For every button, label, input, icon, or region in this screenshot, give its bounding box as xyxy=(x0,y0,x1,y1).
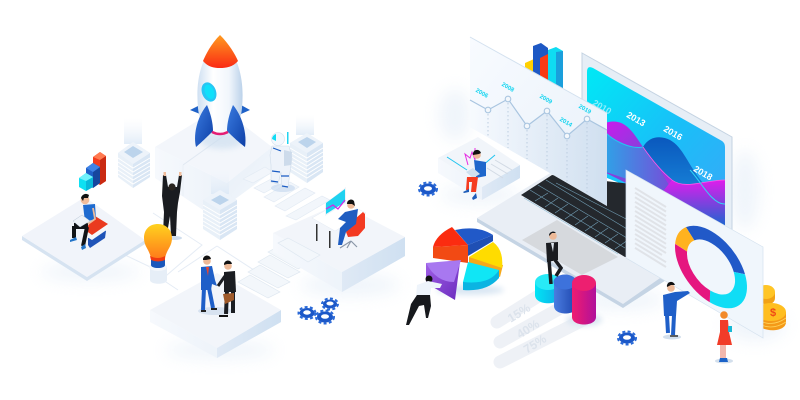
percentage bars: 40% xyxy=(514,317,542,341)
figure: man with laptop on books xyxy=(70,194,108,250)
red slice xyxy=(433,227,468,263)
yellow slice xyxy=(469,242,503,277)
gears: cluster xyxy=(298,298,338,324)
line chart: 2009 xyxy=(538,94,553,106)
lower stairs xyxy=(238,246,310,298)
blue cylinder xyxy=(554,274,577,314)
figure: man sitting with laptop xyxy=(463,150,486,200)
cyan slice xyxy=(463,262,499,290)
document panel xyxy=(626,170,763,338)
figure: man pointing at donut xyxy=(663,282,690,340)
chart: area chart on screen: 2013 xyxy=(625,110,647,128)
chart: left bars xyxy=(79,152,106,191)
upper stairs xyxy=(243,167,330,220)
donut chart xyxy=(669,201,753,333)
platform: right xyxy=(273,203,405,292)
floor outlines xyxy=(125,213,260,290)
percentage bars: 15% xyxy=(505,301,533,325)
line chart xyxy=(470,82,607,194)
server stack: centre xyxy=(203,170,237,240)
icon: rocket xyxy=(190,35,250,147)
screen panel xyxy=(582,53,732,232)
blue slice xyxy=(455,228,493,256)
man in blue suit xyxy=(201,255,217,311)
gear: by small platform xyxy=(419,182,437,196)
percentage bars xyxy=(497,295,583,362)
pie chart xyxy=(426,227,504,300)
line chart: 2008 xyxy=(500,82,515,94)
stairs: top step over right platform xyxy=(278,238,320,262)
chart: bars behind line chart xyxy=(525,43,563,90)
gear: bottom centre xyxy=(618,332,636,344)
platform: centre with rocket pad xyxy=(155,107,272,210)
line chart: 2014 xyxy=(558,117,573,129)
figure: person at desk xyxy=(312,187,366,248)
ground shadows xyxy=(40,89,785,359)
figure: astronaut xyxy=(270,132,295,192)
chart: area chart on screen xyxy=(587,67,725,226)
icon: coins: $ xyxy=(770,307,776,319)
cyan cylinder xyxy=(535,274,561,303)
platform: left xyxy=(22,197,145,281)
icon: coins xyxy=(756,285,786,330)
platform: small with man xyxy=(438,137,520,200)
laptop xyxy=(477,167,700,308)
figure: man on cylinders xyxy=(546,232,561,284)
line chart: 2019 xyxy=(577,104,592,116)
percentage bars: 75% xyxy=(521,332,549,356)
text lines xyxy=(635,188,666,267)
figure: two men shaking hands xyxy=(198,255,236,316)
purple detached slice xyxy=(426,260,461,300)
platform: bottom xyxy=(150,273,281,358)
line chart panel xyxy=(470,37,607,206)
touchpad xyxy=(522,220,618,275)
figure: man pushing pie slice xyxy=(406,276,442,325)
man in black suit xyxy=(218,260,236,316)
figure: woman in red dress xyxy=(715,311,733,364)
figure: man raising arms xyxy=(162,172,182,240)
chart: area chart on screen: 2010 xyxy=(591,98,613,116)
chart: area chart on screen: 2018 xyxy=(692,164,714,182)
chart: area chart on screen: 2016 xyxy=(662,124,684,142)
icon: light bulb xyxy=(144,224,172,284)
magenta cylinder xyxy=(572,275,596,324)
server stack: left xyxy=(118,118,150,188)
server stack: right xyxy=(290,115,323,183)
line chart: 2006 xyxy=(474,88,489,100)
cylinders xyxy=(535,274,602,326)
keyboard xyxy=(521,175,640,258)
